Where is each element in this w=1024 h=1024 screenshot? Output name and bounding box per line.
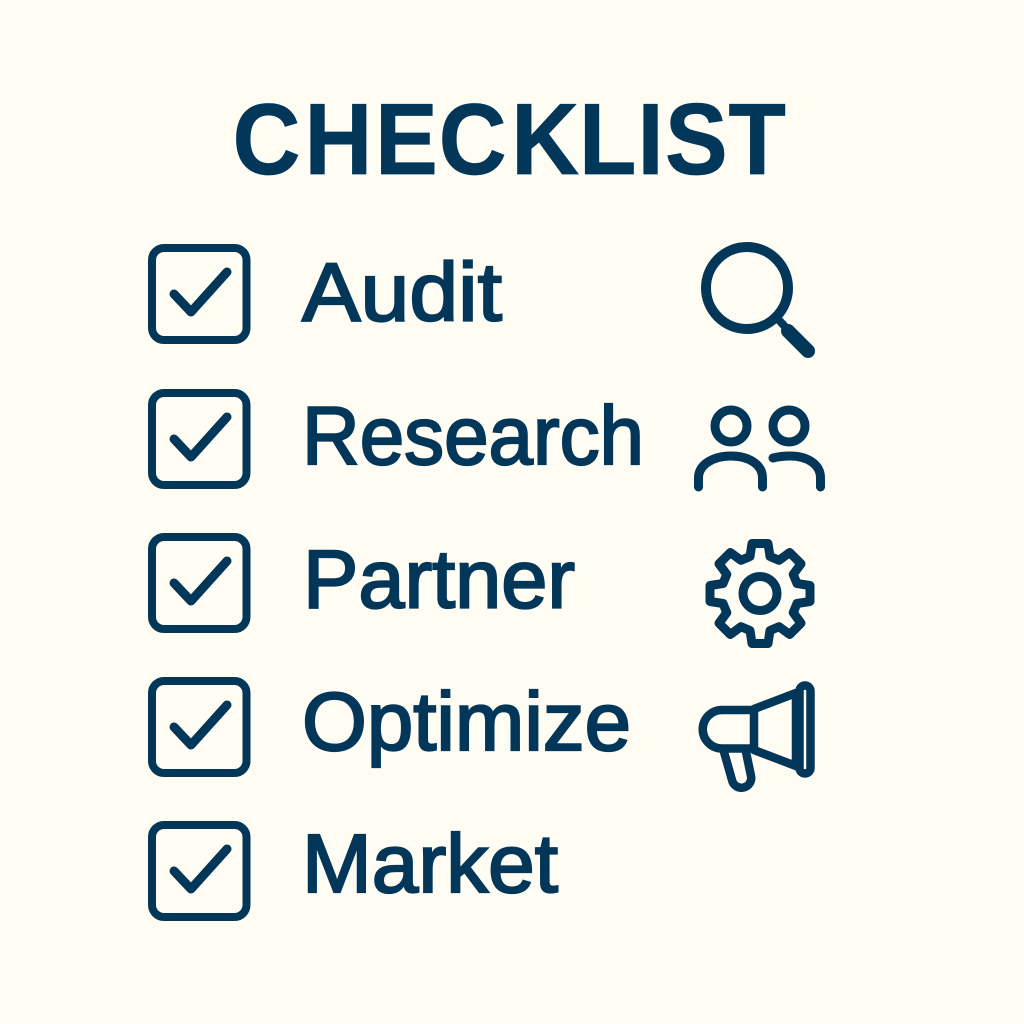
checklist row: Partner: [152, 532, 575, 629]
label: Audit: Audit: [302, 246, 502, 338]
checklist row: Audit: [152, 246, 502, 340]
icon: megaphone: [703, 686, 810, 788]
checkbox: Audit: [152, 248, 246, 340]
icon: magnifying glass: [706, 247, 808, 351]
checklist row: Optimize: [152, 675, 631, 773]
checkbox: Optimize: [152, 681, 246, 773]
checkbox: Market: [152, 825, 246, 917]
icon: two people: [698, 410, 820, 487]
label: Optimize: Optimize: [302, 675, 631, 768]
icon: gear: [710, 544, 810, 644]
checklist row: Research: [152, 389, 644, 485]
label: Research: Research: [302, 389, 644, 482]
title: CHECKLIST: [233, 83, 786, 196]
checklist row: Market: [152, 817, 558, 917]
checkbox: Partner: [152, 537, 246, 629]
label: Partner: Partner: [303, 532, 575, 626]
checkbox: Research: [152, 393, 246, 485]
label: Market: Market: [302, 817, 558, 910]
